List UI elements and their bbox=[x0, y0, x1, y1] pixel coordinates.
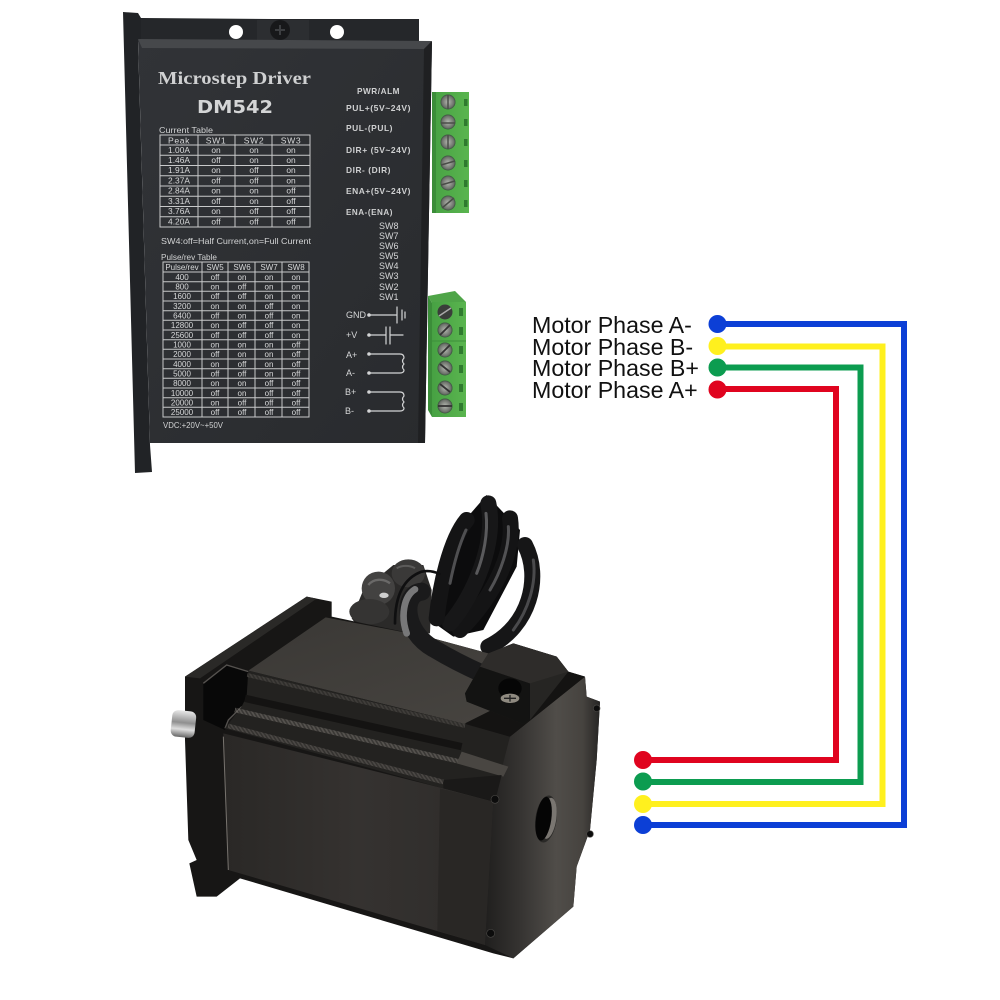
pulse per revolution table: off bbox=[292, 340, 301, 350]
pulse per revolution table: off bbox=[292, 360, 301, 369]
pulse per revolution table: 800 bbox=[175, 282, 189, 292]
DIP switch labels: SW3 bbox=[379, 271, 399, 281]
pulse per revolution table: on bbox=[238, 340, 246, 350]
pulse per revolution table: on bbox=[265, 360, 273, 369]
current table: 3.76A bbox=[168, 206, 190, 216]
control terminal labels: ENA+(5V~24V) bbox=[346, 186, 411, 196]
wire: red phase A+ bbox=[634, 380, 836, 769]
current table: on bbox=[249, 145, 259, 155]
control terminal labels: DIR+ (5V~24V) bbox=[346, 145, 411, 155]
loop strands bbox=[437, 503, 532, 647]
current table bbox=[159, 125, 310, 227]
current table: off bbox=[286, 206, 296, 216]
pulse per revolution table: on bbox=[211, 340, 219, 350]
pulse per revolution table: on bbox=[238, 312, 246, 320]
pulse per revolution table: off bbox=[211, 331, 220, 340]
control terminal labels: DIR- (DIR) bbox=[346, 165, 391, 175]
pulse per revolution table: off bbox=[238, 292, 247, 301]
laminate seam bbox=[223, 737, 228, 870]
pulse per revolution table: 400 bbox=[175, 273, 189, 282]
pulse per revolution table: SW6 bbox=[233, 263, 251, 272]
DIP switch labels: SW1 bbox=[379, 292, 399, 302]
pulse per revolution table: SW5 bbox=[206, 263, 224, 272]
pulse per revolution table: off bbox=[292, 408, 301, 417]
pulse per revolution table: off bbox=[238, 360, 247, 369]
pulse per revolution table: off bbox=[265, 321, 274, 330]
motor phase labels: Motor Phase A- bbox=[532, 312, 692, 338]
current table: on bbox=[211, 145, 221, 155]
current table: 2.84A bbox=[168, 186, 190, 196]
current table: off bbox=[286, 186, 296, 196]
wire: yellow phase B- bbox=[634, 337, 882, 813]
pulse per revolution table: off bbox=[292, 370, 301, 378]
switch 4 note: SW4:off=Half Current,on=Full Current bbox=[161, 236, 312, 246]
motor shaft bbox=[170, 709, 197, 739]
supply voltage note: VDC:+20V~+50V bbox=[163, 420, 223, 430]
cable connector block bbox=[465, 643, 568, 724]
current table: off bbox=[211, 196, 221, 206]
side grooves bbox=[228, 675, 465, 782]
motor phase labels: Motor Phase A+ bbox=[532, 377, 698, 403]
pulse per revolution table: 5000 bbox=[173, 370, 191, 378]
power and motor terminal labels with symbols: B+ bbox=[345, 387, 356, 397]
current table: on bbox=[211, 206, 221, 216]
control terminal labels: ENA-(ENA) bbox=[346, 207, 393, 217]
pulse per revolution table: off bbox=[211, 389, 220, 398]
cap mounting pocket bbox=[203, 665, 248, 730]
current table: 4.20A bbox=[168, 216, 190, 226]
power and motor terminal labels with symbols bbox=[345, 307, 405, 416]
pulse per revolution table: on bbox=[238, 379, 246, 388]
pulse per revolution table: on bbox=[292, 331, 300, 340]
back mounting plate bbox=[123, 12, 419, 473]
pulse per revolution table: 20000 bbox=[171, 398, 194, 408]
current table: off bbox=[286, 196, 296, 206]
cap upper rim bbox=[185, 597, 317, 678]
DIP switch labels bbox=[379, 221, 399, 302]
pulse per revolution table: off bbox=[292, 350, 301, 359]
pulse per revolution table: 8000 bbox=[173, 379, 191, 388]
current table: 1.91A bbox=[168, 165, 190, 175]
pulse per revolution table: on bbox=[211, 321, 219, 330]
pulse per revolution table: on bbox=[292, 273, 300, 282]
pulse per revolution table: 1600 bbox=[173, 292, 191, 301]
loop backing bbox=[430, 495, 520, 637]
pulse per revolution table: on bbox=[292, 292, 300, 301]
wiring diagram bbox=[532, 312, 904, 834]
pulse per revolution table: off bbox=[211, 370, 220, 378]
pulse per revolution table: off bbox=[292, 379, 301, 388]
current table: off bbox=[249, 206, 259, 216]
DIP switch labels: SW4 bbox=[379, 261, 399, 271]
pulse per revolution table: off bbox=[238, 408, 247, 417]
pulse per revolution table: on bbox=[238, 273, 246, 282]
current table: on bbox=[286, 165, 296, 175]
shaft hole bbox=[532, 794, 560, 844]
retaining ring and front cable bbox=[395, 571, 482, 673]
pulse per revolution table: off bbox=[211, 292, 220, 301]
pulse per revolution table: on bbox=[211, 282, 219, 292]
pulse per revolution table: off bbox=[238, 398, 247, 408]
rear coil lumps bbox=[349, 559, 432, 633]
bottom green terminal block bbox=[428, 291, 466, 417]
power and motor terminal labels with symbols: GND bbox=[346, 310, 366, 320]
current table: on bbox=[286, 176, 296, 186]
motor phase labels: Motor Phase B- bbox=[532, 334, 693, 360]
current table: SW3 bbox=[281, 136, 301, 146]
darker side band bbox=[437, 788, 493, 945]
current table: off bbox=[286, 216, 296, 226]
current table: on bbox=[211, 186, 221, 196]
current table: off bbox=[249, 176, 259, 186]
motor phase labels: Motor Phase B+ bbox=[532, 355, 699, 381]
DIP switch labels: SW5 bbox=[379, 251, 399, 261]
power and motor terminal labels with symbols: +V bbox=[346, 330, 357, 340]
control terminal labels: PUL-(PUL) bbox=[346, 123, 393, 133]
model name: DM542: DM542 bbox=[197, 97, 273, 118]
pulse per revolution table bbox=[161, 252, 309, 417]
current table: 1.46A bbox=[168, 155, 190, 165]
pulse per revolution table: Pulse/rev Table bbox=[161, 252, 217, 262]
current table: off bbox=[211, 216, 221, 226]
current table: Current Table bbox=[159, 125, 213, 135]
current table: Peak bbox=[168, 136, 190, 146]
panel right bevel bbox=[418, 41, 432, 443]
pulse per revolution table: 4000 bbox=[173, 360, 191, 369]
pulse per revolution table: 25000 bbox=[171, 408, 194, 417]
pulse per revolution table: on bbox=[238, 389, 246, 398]
pulse per revolution table: 6400 bbox=[173, 312, 191, 320]
pulse per revolution table: off bbox=[211, 350, 220, 359]
power and motor terminal labels with symbols: B- bbox=[345, 406, 354, 416]
front corner ridge bbox=[443, 672, 585, 802]
pulse per revolution table: off bbox=[238, 370, 247, 378]
DIP switch labels: SW7 bbox=[379, 231, 399, 241]
pulse per revolution table: off bbox=[238, 282, 247, 292]
pulse per revolution table: 3200 bbox=[173, 302, 191, 311]
pulse per revolution table: on bbox=[211, 398, 219, 408]
pulse per revolution table: on bbox=[292, 321, 300, 330]
current table: on bbox=[249, 186, 259, 196]
pulse per revolution table: on bbox=[265, 282, 273, 292]
pulse per revolution table: on bbox=[292, 282, 300, 292]
current table: on bbox=[211, 165, 221, 175]
motor silhouette bbox=[185, 597, 600, 958]
pulse per revolution table: 1000 bbox=[173, 340, 191, 350]
front end face bbox=[485, 677, 600, 958]
pulse per revolution table: SW7 bbox=[260, 263, 278, 272]
heading: Microstep Driver: Microstep Driver bbox=[158, 68, 311, 88]
pulse per revolution table: off bbox=[292, 389, 301, 398]
DIP switch labels: SW6 bbox=[379, 241, 399, 251]
pulse per revolution table: SW8 bbox=[287, 263, 305, 272]
pulse per revolution table: 2000 bbox=[173, 350, 191, 359]
control terminal labels bbox=[346, 86, 411, 217]
current table: on bbox=[249, 155, 259, 165]
current table: 3.31A bbox=[168, 196, 190, 206]
motor top surface bbox=[248, 617, 568, 724]
pulse per revolution table: off bbox=[265, 312, 274, 320]
pulse per revolution table: on bbox=[211, 302, 219, 311]
pulse per revolution table: 25600 bbox=[171, 331, 194, 340]
pulse per revolution table: on bbox=[265, 273, 273, 282]
power and motor terminal labels with symbols: A+ bbox=[346, 350, 357, 360]
pulse per revolution table: on bbox=[265, 292, 273, 301]
current table: 2.37A bbox=[168, 176, 190, 186]
wire: blue phase A- bbox=[634, 315, 904, 834]
DIP switch labels: SW8 bbox=[379, 221, 399, 231]
pulse per revolution table: on bbox=[265, 350, 273, 359]
pulse per revolution table: on bbox=[265, 340, 273, 350]
pulse per revolution table: 12800 bbox=[171, 321, 194, 330]
top green terminal block bbox=[432, 92, 469, 213]
wire: green phase B+ bbox=[634, 358, 860, 790]
pulse per revolution table: off bbox=[265, 302, 274, 311]
pulse per revolution table: off bbox=[238, 331, 247, 340]
motor phase labels bbox=[532, 312, 699, 403]
current table: off bbox=[211, 176, 221, 186]
pulse per revolution table: off bbox=[265, 379, 274, 388]
pulse per revolution table: off bbox=[265, 408, 274, 417]
pulse per revolution table: 10000 bbox=[171, 389, 194, 398]
pulse per revolution table: off bbox=[211, 312, 220, 320]
motor side surface bbox=[223, 733, 493, 945]
pulse per revolution table: off bbox=[292, 398, 301, 408]
pulse per revolution table: on bbox=[211, 379, 219, 388]
pulse per revolution table: on bbox=[238, 350, 246, 359]
pulse per revolution table: off bbox=[211, 408, 220, 417]
corner screw holes bbox=[487, 705, 600, 937]
current table: SW1 bbox=[206, 136, 226, 146]
current table: off bbox=[211, 155, 221, 165]
pulse per revolution table: on bbox=[292, 302, 300, 311]
pulse per revolution table: on bbox=[238, 302, 246, 311]
current table: 1.00A bbox=[168, 145, 190, 155]
groove band bbox=[225, 671, 510, 800]
power and motor terminal labels with symbols: A- bbox=[346, 368, 355, 378]
microstep driver unit bbox=[123, 12, 469, 473]
current table: off bbox=[249, 216, 259, 226]
pulse per revolution table: off bbox=[265, 389, 274, 398]
pulse per revolution table: off bbox=[265, 398, 274, 408]
pulse per revolution table: on bbox=[265, 370, 273, 378]
pulse per revolution table: on bbox=[211, 360, 219, 369]
current table: on bbox=[249, 196, 259, 206]
control terminal labels: PWR/ALM bbox=[357, 86, 400, 96]
pulse per revolution table: on bbox=[292, 312, 300, 320]
pulse per revolution table: off bbox=[238, 321, 247, 330]
current table: on bbox=[286, 155, 296, 165]
control terminal labels: PUL+(5V~24V) bbox=[346, 103, 411, 113]
DIP switch labels: SW2 bbox=[379, 282, 399, 292]
pulse per revolution table: off bbox=[211, 273, 220, 282]
rear cable coil and loops bbox=[349, 495, 534, 647]
pulse per revolution table: off bbox=[265, 331, 274, 340]
driver front panel bbox=[138, 40, 432, 443]
current table: on bbox=[286, 145, 296, 155]
loop highlights bbox=[450, 513, 534, 630]
current table: SW2 bbox=[244, 136, 264, 146]
pulse per revolution table: Pulse/rev bbox=[165, 263, 199, 272]
current table: off bbox=[249, 165, 259, 175]
stepper motor bbox=[170, 495, 600, 958]
panel top bevel bbox=[138, 39, 432, 49]
